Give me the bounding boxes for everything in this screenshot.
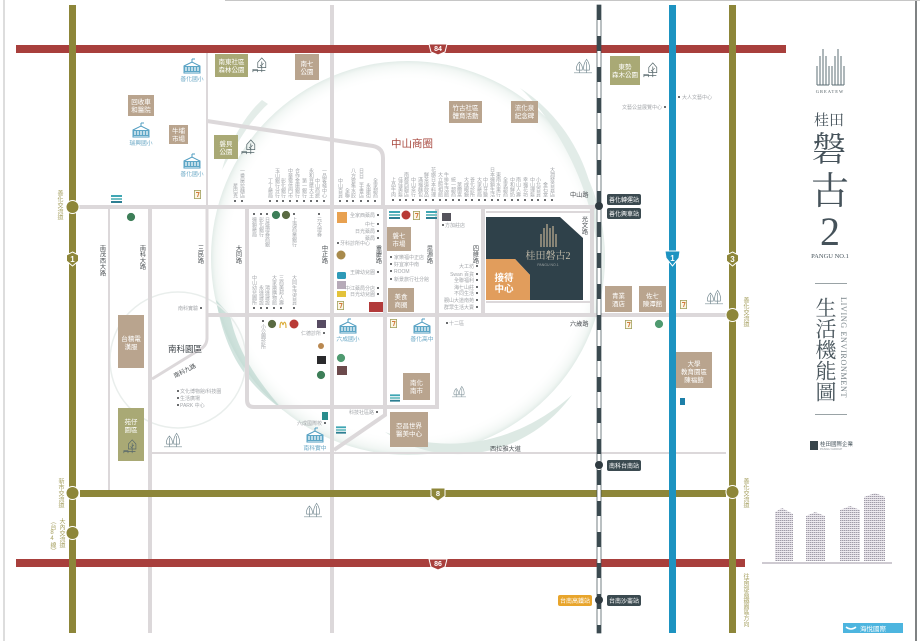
list along Chongqing Road: 好宜家中南 [394,261,419,268]
tree with bench 2 [242,140,255,154]
school 南科實中 [303,428,327,452]
route badge 86: 86 [434,561,442,568]
list along Chongqing Road [337,212,478,311]
inner block shop columns: 連鎖藥局 [251,216,257,238]
north shop columns along Zhongshan Road: 統一超商 [450,176,456,198]
route badge 84: 84 [434,46,442,53]
station label 南科台南站: 南科台南站 [609,462,639,470]
inner block shop columns: 中山幼兒園所 [251,274,257,306]
bottom rule [815,414,847,415]
list along Chongqing Road: 家樂福中正店 [394,254,424,261]
north shop columns along Zhongshan Road: 小北百貨 [535,176,541,198]
reception label: 中心 [494,283,514,295]
station label 台南高鐵站: 台南高鐵站 [560,597,590,605]
red signage [369,302,383,312]
inner block shop columns: 上海商業銀行 [291,216,297,248]
north shop columns along Zhongshan Road: 八方雲集水餃 [350,168,356,199]
living environment rotated: LIVING ENVIRONMENT [839,297,848,398]
station label 南科台南站 [607,460,641,471]
north shop columns along Zhongshan Road: 彰化銀行 [280,177,286,199]
agency logo bar: 海悅國際 [860,624,886,633]
interchange labels: 善化交流道 [742,477,749,509]
north shop columns along Zhongshan Road: 第一銀行 [301,177,307,199]
box 美食商圈 [388,288,414,312]
box 竹古社區: 竹古社區 [452,103,479,112]
north shop columns along Zhongshan Road: 丁丁藥局 [267,178,273,199]
box 竹古社區: 體育活動 [452,111,479,120]
park 崙東社區 [215,54,248,77]
box 台積電漢服: 台積電 [121,334,141,343]
north shop columns along Zhongshan Road: 中華電信門市 [287,167,293,199]
park 苑仔園區: 苑仔 [124,417,138,426]
box 竹古社區 [449,101,482,123]
north shop columns along Zhongshan Road: 鮮茶道飲品 [423,171,429,198]
box 青業酒店: 青業 [612,291,626,300]
box 南七公園: 公園 [300,68,314,76]
route badge 1 west: 1 [70,255,75,264]
north shop columns along Zhongshan Road: 金石堂 [542,181,548,197]
miscellaneous point labels: 南科實驗 [178,305,198,312]
box 磐七市場: 市場 [392,239,406,248]
north shop columns along Zhongshan Road: 南都西服店 [403,171,409,198]
route badge 84 [429,44,447,55]
north shop columns along Zhongshan Road: 中和鮮奶 [509,176,515,198]
school 瑞興國小 [129,123,153,147]
school 善化高中: 善化高中 [410,335,434,343]
road labels: 重慶路 [374,244,382,265]
box 牛埔市場: 市場 [172,134,186,143]
list along Chongqing Road: 中七 [365,221,375,228]
north shop columns along Zhongshan Road: 中山理髮 [529,176,535,198]
north shop columns along Zhongshan Road: 星巴克 [232,183,238,199]
miscellaneous point labels: PARK 中心 [180,402,205,409]
store and bank icons [111,190,687,434]
box 佐七陳潭館 [639,286,666,312]
box 佐七陳潭館: 佐七 [646,291,660,300]
school 六成國小 [336,319,360,343]
box 佐七陳潭館: 陳潭館 [643,299,663,308]
school icons [129,59,434,452]
north shop columns along Zhongshan Road: 玉山銀行分行 [274,168,280,199]
trees 5 [452,386,466,397]
box 美食商圈: 美食 [394,292,408,301]
interchange labels: 善化交流道 [56,189,63,221]
coffee and teal icons [318,250,347,375]
north shop columns along Zhongshan Road: 合作金庫銀行 [294,167,300,199]
box 回收車和醫院: 回收車 [131,97,151,106]
school 善化國小 north [180,59,204,83]
road labels: 西拉雅大道 [490,445,521,453]
road labels: 大同路 [234,244,242,265]
project title: 古 [811,171,849,213]
north shop columns along Zhongshan Road: 善化診所 [469,176,475,198]
convenience store icons [194,190,687,329]
route badge 3: 3 [730,255,735,264]
road labels: 四維路 [472,245,479,265]
inner block shop columns [251,213,322,350]
list along Chongqing Road: 王牌幼兒園 [350,269,375,276]
school 瑞興國小: 瑞興國小 [129,139,153,147]
north shop columns along Zhongshan Road: 花旗日本料理 [430,166,436,197]
miscellaneous point labels: 大人文藝中心 [682,94,712,101]
interchange labels [49,189,749,627]
trees 4 [304,503,322,517]
interchange labels: 善化交流道 [742,296,749,328]
box 牛埔市場: 牛埔 [172,126,186,135]
park 苑仔園區 [118,408,144,461]
list along Chongqing Road: 全聯福利 [454,277,474,284]
red round store icons [290,210,410,328]
list along Chongqing Road: 大工坊 [459,263,474,270]
trees 2 [705,290,723,304]
tower illustration [762,493,892,563]
box 南化南市: 南化 [410,378,424,387]
interchange nodes [66,200,739,540]
highway 8 [80,490,726,497]
north shop columns along Zhongshan Road: 永康街 [365,182,371,199]
road labels: 思源路 [426,245,433,265]
miscellaneous point labels: 仁德診所 [301,330,321,337]
north shop columns along Zhongshan Road: 大潤發百貨店 [549,166,555,198]
route badge 86 [429,559,447,570]
north shop columns along Zhongshan Road: 全家超商 [372,178,378,199]
station label 台南高鐵站 [558,595,592,606]
north shop columns along Zhongshan Road: 全聯 [344,188,350,199]
reception label: 接待 [494,272,514,284]
english title: PANGU NO.1 [811,253,849,260]
school 善化國小: 善化國小 [180,170,204,178]
tree with bench [253,58,266,72]
north shop columns along Zhongshan Road: 大成眼鏡 [463,176,469,198]
interchange labels: 大內交流道 [58,517,65,549]
school 善化高中 [410,319,434,343]
brand tower logo [817,49,844,85]
box 南化南市 [403,373,430,400]
park 崙東社區: 南東社區 [218,57,245,66]
school 善化國小 north: 善化國小 [180,75,204,83]
expressway 86 [16,559,745,567]
miscellaneous point labels: 生活廣場 [180,395,200,402]
box 青業酒店: 酒店 [612,299,626,308]
brand name greatew: GREATEW [816,89,844,94]
box 南七公園: 南七 [300,59,314,68]
road labels [98,191,589,453]
route badge 1 blue [665,251,680,266]
route badge 1 west [66,252,78,266]
school 南科實中: 南科實中 [303,444,327,452]
north shop columns along Zhongshan Road: 大家藥局 [476,176,482,198]
list along Chongqing Road: 中江藥局分店 [345,285,375,292]
project site [486,217,583,300]
road labels: 南科大路 [138,244,146,271]
project title: 桂田 [814,112,844,129]
box 大學教育園區: 大學 [688,359,701,368]
developer logo [810,440,854,451]
interchange labels: 往南部高鐵園區方向 [742,572,749,627]
route badge 3 [726,252,738,266]
station dots [595,202,603,604]
inner block shop columns: 鴻達建設 [264,284,270,306]
inner block shop columns: 元大證券 [316,217,322,238]
road labels: 南茂西大路 [98,244,106,277]
box 美食商圈: 商圈 [394,300,408,309]
route badge 1 blue: 1 [670,254,675,263]
park 崙東社區: 森林公園 [218,65,244,74]
north shop columns along Zhongshan Road: 南山人壽 [515,176,521,198]
business district title: 中山商圈 [391,137,433,150]
park 苑仔園區: 園區 [124,426,138,434]
north shop columns along Zhongshan Road: 萊爾富 [456,181,462,198]
reception label [494,272,514,295]
north shop columns along Zhongshan Road: 滿福麵包 [417,176,423,197]
railway line [597,5,601,633]
box 牛埔市場 [169,125,188,144]
north shop columns along Zhongshan Road: 中山百貨 [337,177,343,199]
road labels: 光文路 [580,215,588,236]
reception area [486,259,530,300]
local road network [78,5,726,633]
inner block shop columns: 日盛證券商銀 [264,217,270,248]
miscellaneous point labels: 十二區 [449,320,464,327]
green round store icons [126,210,664,380]
project name: 桂田磐古2 [526,249,570,262]
north shop columns along Zhongshan Road: 日日二手書店 [358,168,364,199]
station label 善化轉運站 [607,194,641,205]
project title [811,112,849,254]
list along Chongqing Road: 全家西藥局 [350,212,375,219]
golden arches icon [280,322,286,328]
list along Chongqing Road: 牙科診所中心 [340,240,370,247]
north shop columns along Zhongshan Road: 永和豆漿大王 [308,167,314,198]
list along Chongqing Road: ROOM [394,269,410,275]
trees 1 [574,59,592,73]
school 善化國小 [180,154,204,178]
miscellaneous point labels: 科技社區路 [349,409,374,416]
top rule [815,283,847,284]
school 六成國小: 六成國小 [336,335,360,343]
north shop columns along Zhongshan Road: 中山商旅 [314,177,320,199]
park 磐貝公園: 公園 [220,148,232,156]
north shop columns along Zhongshan Road: 中山牙醫 [482,176,488,198]
route badge 8: 8 [436,489,440,498]
station label 台南沙崙站: 台南沙崙站 [609,597,639,605]
list along Chongqing Road: 群眾生活大賣 [444,304,474,311]
box 亞昌世界 [390,412,428,447]
freeway 3 west line [69,5,76,633]
box 大學教育園區: 教育園區 [681,367,708,376]
miscellaneous point labels: 文藝公益展覽中心 [622,104,662,111]
box 回收車和醫院: 和醫院 [131,105,151,114]
road labels: 六歲路 [570,320,589,328]
box 大學教育園區 [676,352,712,388]
park 東勢森木公園 [610,56,640,85]
freeway 3 east line [729,5,736,633]
list along Chongqing Road: 日光幼兒園 [350,291,375,298]
trees 3 [164,433,182,447]
box 南七公園 [295,54,319,80]
park 東勢森木公園: 森木公園 [612,70,638,79]
north shop columns along Zhongshan Road: 一番屋拉麵店 [239,168,245,199]
project block [486,217,583,300]
tree with bench 3 [644,63,657,77]
project title: 磐 [812,131,846,169]
north shop columns along Zhongshan Road: 上品牛肉 [390,176,396,197]
north shop columns along Zhongshan Road [232,166,555,202]
box 流化泉紀念碑: 流化泉 [515,103,535,112]
project english name: PANGU NO.1 [537,263,559,267]
developer logo: PANGU GROUP [820,447,842,451]
box 亞昌世界: 醫美中心 [396,429,422,438]
agency logo bar [843,623,903,633]
miscellaneous point labels: 六成國際校 [297,420,322,427]
Zhongshan business circle [211,61,605,455]
north shop columns along Zhongshan Road: 全家超商 [502,177,508,198]
science park title: 南科園區 [168,344,203,354]
north shop columns along Zhongshan Road: 大立照相館 [437,171,443,198]
developer logo: 桂田國際企業 [820,440,854,448]
box 台積電漢服: 漢服 [124,342,138,351]
inner block shop columns: 大同生活百貨 [291,274,297,306]
landmark boxes [118,54,712,461]
station label 善化興車站: 善化興車站 [609,210,639,218]
north shop columns along Zhongshan Road: 佳佳美髮 [397,176,403,198]
box 流化泉紀念碑 [511,101,538,123]
teal building icon [322,412,328,420]
station label 善化興車站 [607,208,641,219]
north shop columns along Zhongshan Road: 牛排生活館 [443,171,449,198]
catchment circles [110,61,605,455]
list along Chongqing Road: 方加莊店 [445,222,465,229]
north shop columns along Zhongshan Road: 一品客棧中心 [321,168,327,198]
living map title: 生活機能圖 [813,297,837,402]
road labels: 中正路 [320,244,328,265]
miscellaneous point labels: 文化博物館/科技園 [180,388,221,395]
route badge 8 [431,488,445,501]
box 南化南市: 南市 [410,386,424,395]
list along Chongqing Road: 藥局 [365,235,375,242]
list along Chongqing Road: 日光藥局 [355,228,375,235]
orange store icon [337,212,347,223]
interchange labels: 新市交流道 [57,477,64,509]
box 亞昌世界: 亞昌世界 [396,421,422,430]
box 回收車和醫院 [128,95,154,116]
box 磐七市場 [387,227,411,251]
expressway 84 [16,45,786,53]
inner block shop columns: 小公園診所 [260,323,266,350]
list along Chongqing Road: 觀山大道南苑 [444,297,474,304]
brand panel [762,49,903,633]
Nanke circle [110,292,246,428]
list along Chongqing Road: 新景旅行社分館 [394,276,429,283]
north shop columns along Zhongshan Road: 幸福花坊 [522,177,528,198]
box 流化泉紀念碑: 紀念碑 [515,111,535,120]
project title: 2 [820,209,840,254]
list along Chongqing Road: 海七山莊 [454,284,474,291]
north shop columns along Zhongshan Road: 日本連鎖生活 [489,167,495,198]
box 台積電漢服 [118,315,144,368]
box 大學教育園區: 陳福館 [684,375,704,384]
box 磐七市場: 磐七 [392,231,406,240]
inner block shop columns: 永達建設 [258,284,264,306]
park 磐貝公園: 磐貝 [220,139,233,148]
north shop columns along Zhongshan Road: 中山茶行 [410,176,416,198]
road labels: 中山路 [570,191,589,199]
north shop columns along Zhongshan Road: 東南水果行 [495,171,501,198]
blue building icon [680,398,685,405]
interchange labels: （台84線） [49,518,56,554]
miscellaneous point labels [177,94,712,427]
park 磐貝公園 [214,135,238,159]
tree icons [164,58,723,517]
road labels: 三民路 [196,245,204,265]
list along Chongqing Road: Swan 百貨 [450,271,474,278]
park 東勢森木公園: 東勢 [618,62,632,71]
station label 善化轉運站: 善化轉運站 [609,196,639,204]
bank icons [111,195,437,434]
freeway 1 blue line [669,5,676,633]
list along Chongqing Road: 不同生活 [454,290,474,297]
road labels: 南科九路 [172,362,197,380]
inner block shop columns: 三商美邦人壽 [278,275,284,306]
box 青業酒店 [605,286,632,312]
dark square icons [317,213,451,364]
station label 台南沙崙站 [607,595,641,606]
project tower logo [541,224,556,247]
inner block shop columns: 彰化銀行 [258,216,264,238]
inner block shop columns: 大家樂購物館 [271,274,277,306]
